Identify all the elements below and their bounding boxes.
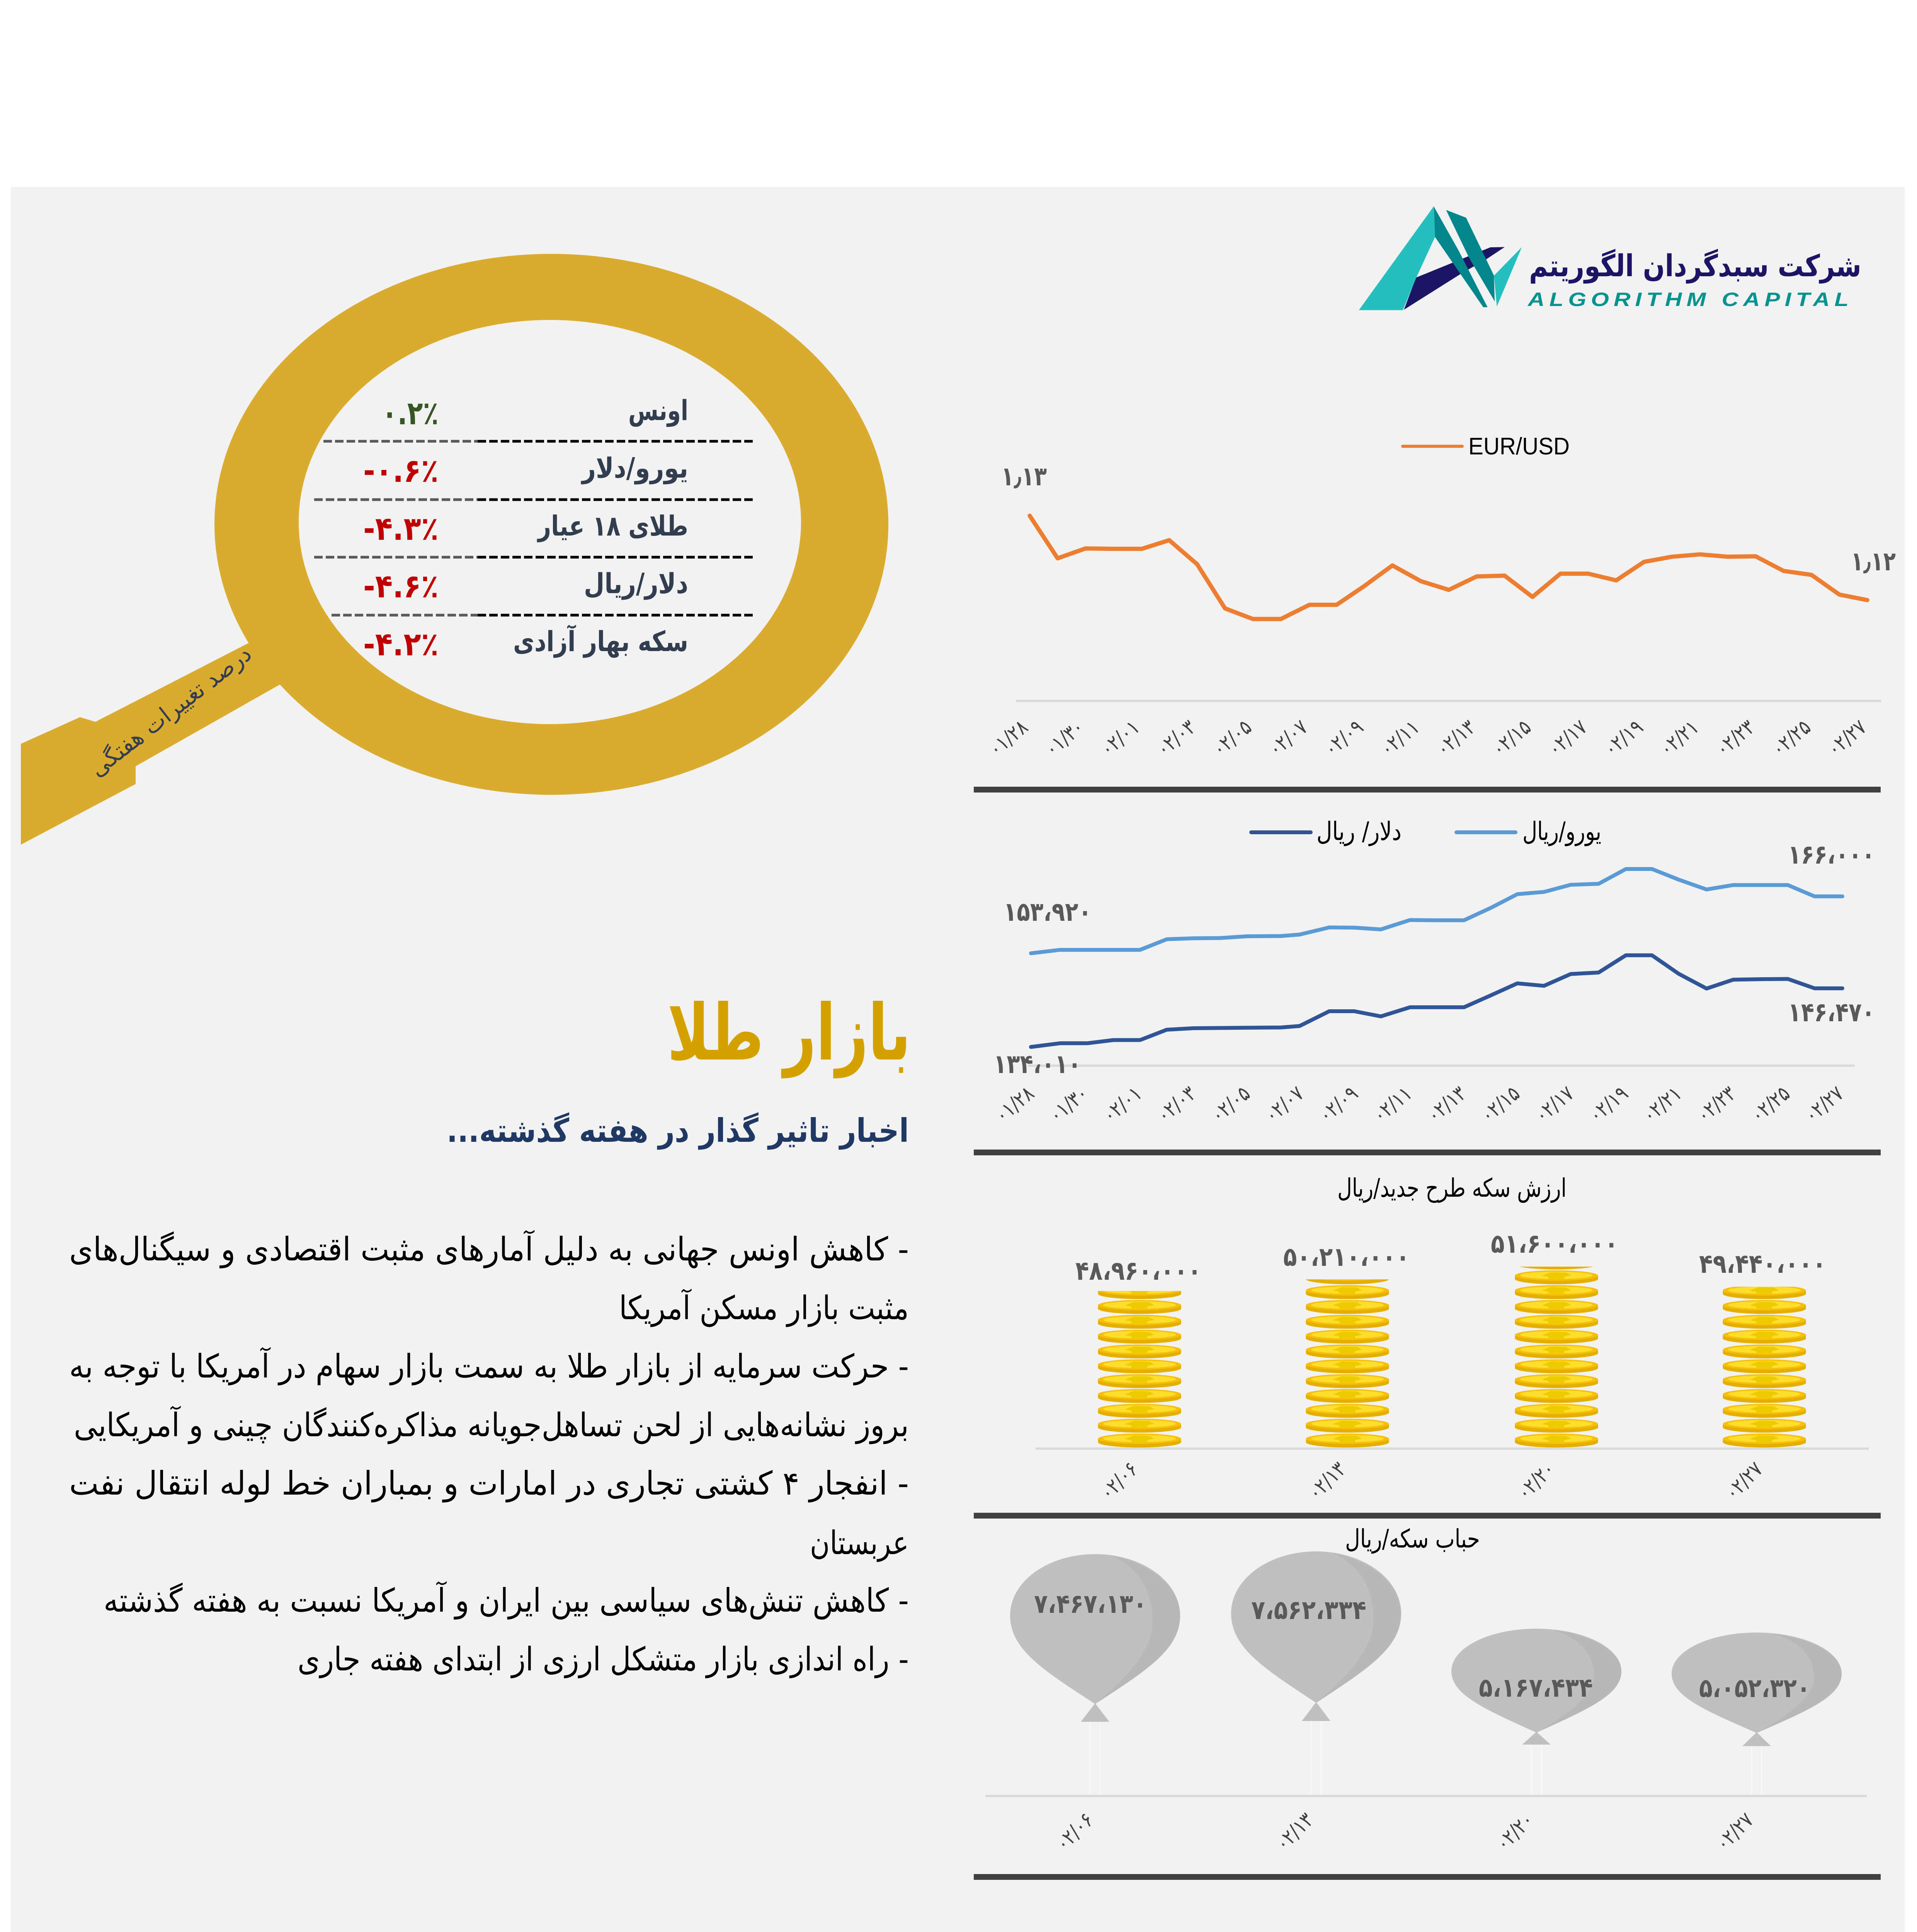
row: euro dollar: -۰.۶٪ [363,452,439,490]
balloon 1 [1010,1554,1180,1795]
news text block: - راه اندازی بازار متشکل ارزی از ابتدای هفته جاری [298,1640,909,1679]
chart: coin bubble balloons [985,1524,1867,1855]
x axis [1016,700,1881,702]
date labels: ۰۲/۰۷ [1264,715,1312,761]
chart: EUR/USD line [984,433,1896,761]
legend dollar rial: دلار/ ریال [1317,816,1402,846]
euro rial series [1031,869,1842,953]
date labels: ۰۲/۲۰ [1512,1457,1560,1505]
date labels: ۰۱/۳۰ [1044,1081,1093,1128]
date labels: ۰۲/۰۳ [1152,1081,1201,1128]
logo english name: ALGORITHM CAPITAL [1527,289,1853,310]
date labels: ۰۲/۱۳ [1271,1808,1318,1855]
row: 18k gold [363,510,688,548]
date labels: ۰۲/۰۹ [1314,1081,1362,1128]
balloon 4: ۵،۰۵۲،۳۲۰ [1699,1673,1810,1704]
eur usd series [1030,516,1867,619]
row dividers [314,441,755,615]
row: euro dollar: یورو/دلار [581,452,688,485]
date labels: ۰۱/۳۰ [1040,715,1089,761]
row: euro dollar [363,452,688,490]
date labels: ۰۲/۰۹ [1319,715,1368,761]
value 4: ۴۹،۴۴۰،۰۰۰ [1699,1249,1826,1279]
chart title: حباب سکه/ریال [1345,1524,1480,1554]
balloon 2 [1231,1551,1401,1795]
news text block: مثبت بازار مسکن آمریکا [619,1289,909,1327]
row: bahar azadi coin: سکه بهار آزادی [513,624,688,658]
logo persian name: شرکت سبدگردان الگوریتم [1529,249,1861,284]
dollar rial series [1031,955,1842,1047]
date labels: ۰۲/۲۱ [1655,715,1703,761]
row: 18k gold: -۴.۳٪ [363,510,439,548]
row: ounce: اونس [628,394,688,427]
date labels: ۰۲/۰۵ [1208,715,1256,761]
date labels: ۰۲/۲۷ [1711,1808,1758,1855]
balloon 3: ۵،۱۶۷،۴۳۴ [1479,1673,1593,1703]
magnifier ring [214,254,888,795]
date labels: ۰۲/۲۵ [1746,1081,1795,1128]
date labels: ۰۲/۰۱ [1098,1081,1146,1128]
date labels: ۰۲/۱۳ [1431,715,1480,761]
news text block: - کاهش تنش‌های سیاسی بین ایران و آمریکا نسبت به هفته گذشته [104,1581,909,1620]
row: 18k gold: طلای ۱۸ عیار [537,510,688,543]
row: bahar azadi coin: -۴.۲٪ [363,625,439,663]
chart title: ارزش سکه طرح جدید/ریال [1337,1173,1567,1203]
date labels: ۰۲/۲۰ [1491,1808,1538,1855]
date labels: ۰۲/۰۱ [1095,715,1144,761]
date labels: ۰۲/۲۳ [1711,715,1759,761]
coin stack 1 [1098,1291,1181,1447]
magnifier: weekly change table [21,254,888,845]
dollar end value: ۱۴۶،۴۷۰ [1788,997,1875,1028]
row: ounce: ۰.۲٪ [382,394,439,432]
date labels [1051,1808,1758,1855]
date labels: ۰۲/۱۵ [1476,1081,1524,1128]
balloon 3 [1451,1629,1621,1795]
balloon 1: ۷،۴۶۷،۱۳۰ [1034,1589,1147,1619]
date labels: ۰۲/۲۱ [1638,1081,1686,1128]
coin stack 3 [1515,1255,1598,1447]
news text block: - کاهش اونس جهانی به دلیل آمارهای مثبت اقتصادی و سیگنال‌های [69,1230,909,1269]
date labels: ۰۲/۰۶ [1051,1808,1098,1855]
date labels: ۰۲/۱۷ [1530,1081,1579,1128]
news text block: - حرکت سرمایه از بازار طلا به سمت بازار سهام در آمریکا با توجه به [69,1347,909,1386]
magnifier handle [21,632,301,845]
euro end value: ۱۶۶،۰۰۰ [1788,840,1875,870]
value 1: ۴۸،۹۶۰،۰۰۰ [1075,1256,1201,1286]
date labels: ۰۲/۱۹ [1599,715,1648,761]
logo [1359,206,1861,310]
date labels: ۰۲/۱۹ [1584,1081,1633,1128]
date labels: ۰۲/۲۷ [1800,1081,1848,1128]
row: dollar rial: دلار/ریال [584,567,688,600]
date labels: ۰۱/۲۸ [990,1081,1039,1128]
date labels: ۰۲/۲۷ [1822,715,1871,761]
date labels: ۰۱/۲۸ [984,715,1032,761]
date labels: ۰۲/۰۳ [1152,715,1200,761]
date labels: ۰۲/۱۱ [1368,1081,1417,1128]
date labels: ۰۲/۲۵ [1767,715,1815,761]
euro start value: ۱۵۳،۹۲۰ [1004,897,1092,927]
date labels: ۰۲/۱۱ [1375,715,1424,761]
date labels: ۰۲/۱۳ [1303,1457,1351,1505]
dollar start value: ۱۳۴،۰۱۰ [993,1049,1081,1080]
date labels: ۰۲/۰۵ [1206,1081,1255,1128]
x axis [1028,1065,1855,1067]
legend euro rial: یورو/ریال [1522,816,1601,846]
date labels: ۰۲/۱۷ [1543,715,1592,761]
news text block [69,1230,909,1679]
value 3: ۵۱،۶۰۰،۰۰۰ [1491,1229,1618,1259]
date labels: ۰۲/۲۳ [1692,1081,1740,1128]
x axis [985,1795,1867,1797]
date labels: ۰۲/۱۵ [1487,715,1536,761]
legend EUR/USD: EUR/USD [1468,433,1570,460]
news text block: بروز نشانه‌هایی از لحن تساهل‌جویانه مذاکره‌کنندگان چینی و آمریکایی [74,1406,909,1444]
handle caption: درصد تغییرات هفتگی [84,640,257,782]
date labels [990,1081,1848,1128]
date labels [984,715,1871,761]
row: bahar azadi coin [363,624,688,663]
magnifier lens [299,320,801,724]
start value: ۱٫۱۳ [1001,461,1047,492]
value 2: ۵۰،۲۱۰،۰۰۰ [1283,1242,1410,1272]
date labels: ۰۲/۰۷ [1260,1081,1308,1128]
chart: dollar and euro to rial lines [990,816,1875,1128]
date labels: ۰۲/۲۷ [1720,1457,1767,1505]
logo mark [1359,206,1522,310]
heading: بازار طلا [667,988,911,1078]
news text block: عربستان [810,1524,909,1562]
subheading: اخبار تاثیر گذار در هفته گذشته... [447,1112,909,1150]
date labels: ۰۲/۰۶ [1095,1457,1143,1505]
end value: ۱٫۱۲ [1851,546,1896,577]
row: dollar rial: -۴.۶٪ [363,567,439,605]
row: dollar rial [363,567,688,605]
row: ounce [382,394,688,432]
date labels: ۰۲/۱۳ [1422,1081,1471,1128]
balloon 4 [1672,1633,1842,1795]
news text block: - انفجار ۴ کشتی تجاری در امارات و بمباران خط لوله انتقال نفت [69,1464,909,1503]
balloon 2: ۷،۵۶۲،۳۳۴ [1251,1595,1366,1626]
date labels [1095,1457,1767,1505]
x axis [1036,1447,1869,1450]
coin stack 4 [1723,1287,1806,1447]
coin stack 2 [1306,1279,1389,1447]
chart: new design coin price coin stacks [1036,1173,1869,1505]
